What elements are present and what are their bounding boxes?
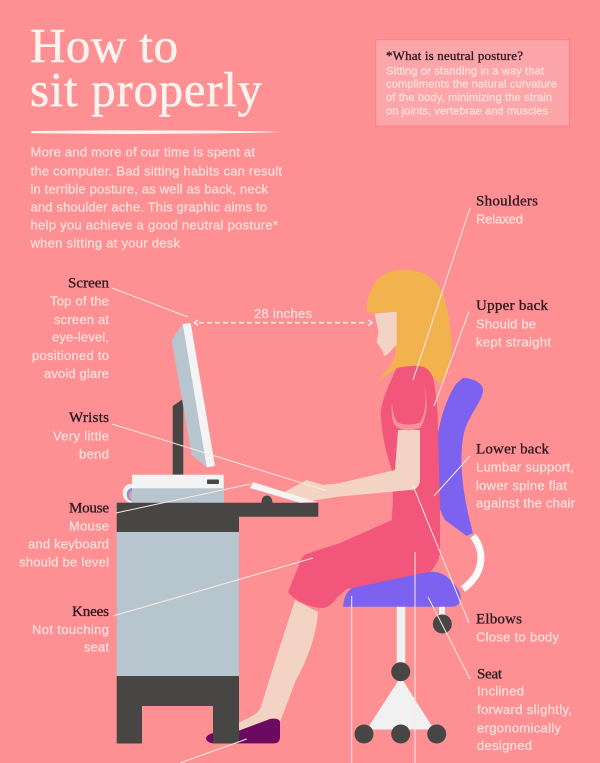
label: screen: avoid glare <box>44 366 109 381</box>
label: elbows: Elbows <box>476 611 522 627</box>
intro text <box>30 145 282 250</box>
callout: what is neutral posture <box>376 40 570 126</box>
label: upper back: kept straight <box>476 335 551 350</box>
title: sit properly <box>30 62 262 117</box>
label: mouse: should be level <box>19 555 109 570</box>
label: seat: forward slightly, <box>477 702 572 717</box>
label: screen: eye-level, <box>52 330 109 345</box>
label: screen: screen at <box>54 312 109 327</box>
monitor stand <box>173 399 183 475</box>
label: seat: Seat <box>477 666 503 682</box>
sleeve and arm <box>285 384 427 502</box>
label: shoulders: Relaxed <box>476 211 523 226</box>
label: mouse <box>19 501 109 570</box>
desk <box>117 503 318 744</box>
callout: what is neutral posture: on joints, vertebrae and muscles <box>386 105 548 117</box>
computer tower <box>132 475 224 503</box>
seat <box>343 572 461 607</box>
label: lower back: lower spine flat <box>476 478 567 493</box>
intro text: and shoulder ache. This graphic aims to <box>30 199 267 214</box>
mug <box>123 484 132 503</box>
label: knees: Not touching <box>32 622 109 637</box>
chair back <box>434 378 483 589</box>
label: seat: ergonomically <box>477 720 562 735</box>
intro text: the computer. Bad sitting habits can result <box>30 163 282 178</box>
hair <box>367 270 452 384</box>
chair stem and wheels <box>354 600 452 744</box>
mouse <box>261 496 272 503</box>
intro text: when sitting at your desk <box>30 235 180 250</box>
label: lower back <box>476 441 576 511</box>
label: upper back: Should be <box>476 316 536 331</box>
label: mouse: and keyboard <box>28 537 109 552</box>
face <box>374 312 397 356</box>
distance arrow: 28 inches: 28 inches <box>254 306 312 321</box>
label: upper back: Upper back <box>476 298 548 314</box>
label: seat: designed <box>477 738 532 753</box>
title: How to <box>30 18 178 73</box>
label: shoulders <box>476 194 538 226</box>
label: screen: positioned to <box>32 348 109 363</box>
label: lower back: Lower back <box>476 441 550 457</box>
title underline <box>31 130 283 134</box>
label: seat <box>477 666 572 753</box>
callout: what is neutral posture: of the body, minimizing the strain <box>386 92 552 104</box>
label: knees <box>32 604 109 655</box>
label: upper back <box>476 298 551 350</box>
label: wrists: Wrists <box>69 410 109 426</box>
callout: what is neutral posture: compliments the natural curvature <box>386 79 557 91</box>
label: screen: Top of the <box>50 294 109 309</box>
intro text: More and more of our time is spent at <box>30 145 255 160</box>
distance arrow: 28 inches <box>194 306 372 325</box>
label: knees: Knees <box>72 604 109 620</box>
keyboard <box>250 482 317 503</box>
label: lower back: Lumbar support, <box>476 460 574 475</box>
label: wrists <box>53 410 109 462</box>
label: mouse: Mouse <box>69 501 109 517</box>
callout: what is neutral posture: *What is neutral posture? <box>386 48 523 63</box>
label: mouse: Mouse <box>69 519 109 534</box>
label: wrists: bend <box>79 447 109 462</box>
callout: what is neutral posture: Sitting or standing in a way that <box>386 65 544 77</box>
label: elbows: Close to body <box>476 630 560 645</box>
label: shoulders: Shoulders <box>476 194 538 210</box>
intro text: help you achieve a good neutral posture* <box>30 217 278 232</box>
label: wrists: Very little <box>53 429 109 444</box>
title <box>30 18 262 117</box>
monitor <box>172 323 215 467</box>
label: screen <box>32 276 110 381</box>
label: knees: seat <box>84 640 109 655</box>
leg and shoe <box>206 600 318 744</box>
leader lines <box>112 208 470 763</box>
intro text: in terrible posture, as well as back, neck <box>30 181 268 196</box>
label: elbows <box>476 611 560 645</box>
label: seat: Inclined <box>477 684 524 699</box>
dress <box>288 364 440 608</box>
label: screen: Screen <box>68 276 110 292</box>
label: lower back: against the chair <box>476 496 576 511</box>
